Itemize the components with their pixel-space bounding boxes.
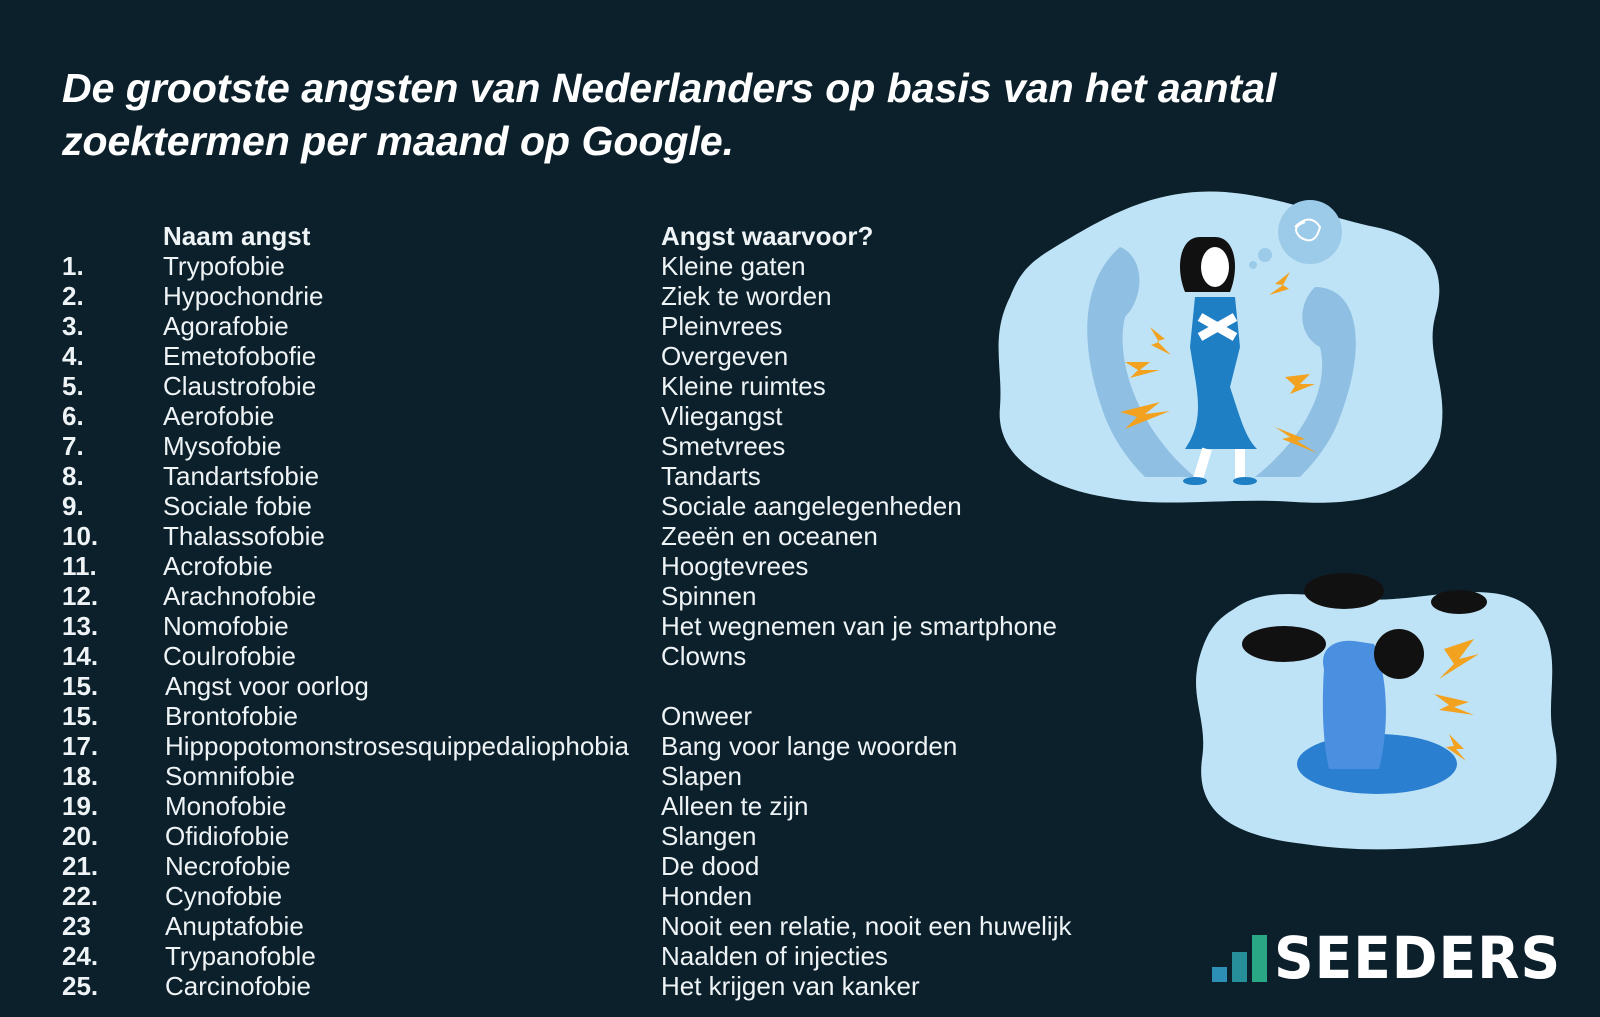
table: fears xyxy=(62,221,1072,1001)
text: Kleine gaten xyxy=(661,251,806,281)
text: Hypochondrie xyxy=(163,281,323,311)
text: Vliegangst xyxy=(661,401,782,431)
text: 12. xyxy=(62,581,98,611)
text: 13. xyxy=(62,611,98,641)
text: Sociale aangelegenheden xyxy=(661,491,962,521)
text: Ziek te worden xyxy=(661,281,832,311)
text: Kleine ruimtes xyxy=(661,371,826,401)
text: Agorafobie xyxy=(163,311,289,341)
icon: bars xyxy=(1212,935,1267,982)
text: 15. xyxy=(62,701,98,731)
text: Zeeën en oceanen xyxy=(661,521,878,551)
text: 8. xyxy=(62,461,84,491)
illustration: sad person under clouds xyxy=(1196,573,1556,850)
text: 4. xyxy=(62,341,84,371)
text: 3. xyxy=(62,311,84,341)
text: 21. xyxy=(62,851,98,881)
text: Anuptafobie xyxy=(165,911,304,941)
text: 25. xyxy=(62,971,98,1001)
text: Onweer xyxy=(661,701,752,731)
text: 23 xyxy=(62,911,91,941)
title: De grootste angsten van Nederlanders op basis van het aantal xyxy=(62,65,1276,111)
text: Monofobie xyxy=(165,791,286,821)
text: 2. xyxy=(62,281,84,311)
text: 5. xyxy=(62,371,84,401)
logo: SEEDERS: SEEDERS xyxy=(1274,924,1561,992)
text: Emetofobofie xyxy=(163,341,316,371)
text: Thalassofobie xyxy=(163,521,325,551)
text: 17. xyxy=(62,731,98,761)
text: 11. xyxy=(62,551,97,581)
text: Spinnen xyxy=(661,581,756,611)
text: Hippopotomonstrosesquippedaliophobia xyxy=(165,731,629,761)
text: Aerofobie xyxy=(163,401,274,431)
text: Claustrofobie xyxy=(163,371,316,401)
text: 1. xyxy=(62,251,84,281)
text: 14. xyxy=(62,641,98,671)
text: Honden xyxy=(661,881,752,911)
text: Naalden of injecties xyxy=(661,941,888,971)
text: 24. xyxy=(62,941,98,971)
text: Somnifobie xyxy=(165,761,295,791)
text: Overgeven xyxy=(661,341,788,371)
text: Clowns xyxy=(661,641,746,671)
text: Coulrofobie xyxy=(163,641,296,671)
illustration: frightened woman xyxy=(998,192,1442,503)
text: 6. xyxy=(62,401,84,431)
text: Tandartsfobie xyxy=(163,461,319,491)
text: Necrofobie xyxy=(165,851,291,881)
text: Smetvrees xyxy=(661,431,785,461)
text: Hoogtevrees xyxy=(661,551,808,581)
text: 15. xyxy=(62,671,98,701)
text: Naam angst xyxy=(163,221,310,251)
text: 9. xyxy=(62,491,84,521)
text: Mysofobie xyxy=(163,431,282,461)
text: Het krijgen van kanker xyxy=(661,971,920,1001)
text: Nomofobie xyxy=(163,611,289,641)
text: 18. xyxy=(62,761,98,791)
text: Slapen xyxy=(661,761,742,791)
text: 20. xyxy=(62,821,98,851)
text: Cynofobie xyxy=(165,881,282,911)
text: Ofidiofobie xyxy=(165,821,289,851)
text: De dood xyxy=(661,851,759,881)
text: 7. xyxy=(62,431,84,461)
title: zoektermen per maand op Google. xyxy=(62,118,734,164)
text: Angst voor oorlog xyxy=(165,671,369,701)
text: Nooit een relatie, nooit een huwelijk xyxy=(661,911,1071,941)
text: Sociale fobie xyxy=(163,491,312,521)
text: Tandarts xyxy=(661,461,761,491)
text: Slangen xyxy=(661,821,756,851)
text: 10. xyxy=(62,521,98,551)
text: Acrofobie xyxy=(163,551,273,581)
text: 22. xyxy=(62,881,98,911)
text: Arachnofobie xyxy=(163,581,316,611)
text: Alleen te zijn xyxy=(661,791,808,821)
text: Carcinofobie xyxy=(165,971,311,1001)
text: Brontofobie xyxy=(165,701,298,731)
title xyxy=(62,65,1278,164)
text: Pleinvrees xyxy=(661,311,782,341)
text: Bang voor lange woorden xyxy=(661,731,957,761)
text: Trypanofoble xyxy=(165,941,316,971)
text: Het wegnemen van je smartphone xyxy=(661,611,1057,641)
text: Trypofobie xyxy=(163,251,285,281)
text: Angst waarvoor? xyxy=(661,221,873,251)
text: 19. xyxy=(62,791,98,821)
